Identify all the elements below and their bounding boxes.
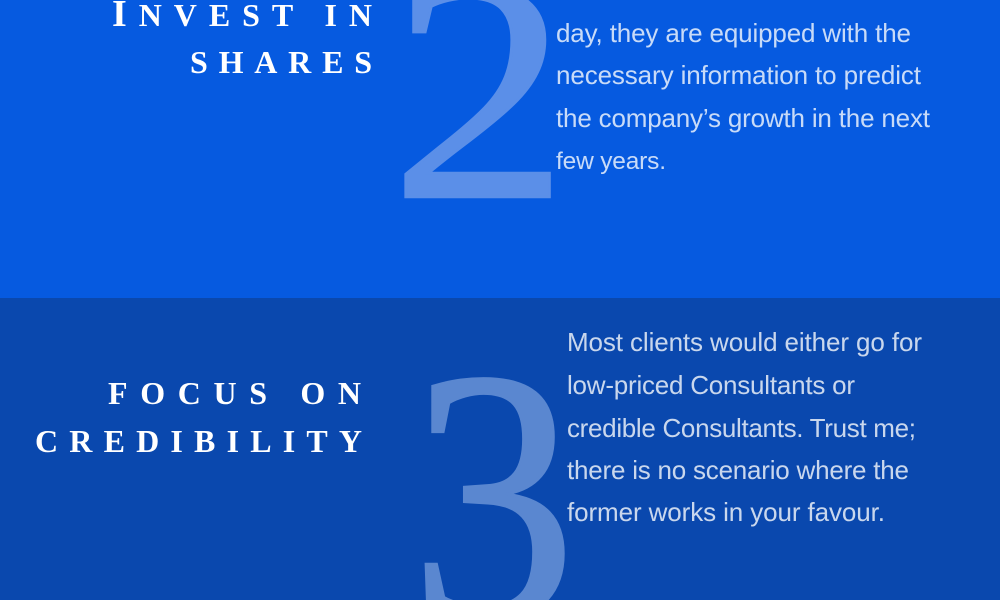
heading: focus on credibility: FOCUS ON: [108, 375, 361, 411]
body text: focus on credibility: Most clients would either go for: [567, 327, 922, 357]
body text: invest in shares: [556, 18, 931, 175]
heading: invest in shares: [112, 0, 372, 80]
body text: focus on credibility: [567, 327, 922, 527]
body text: focus on credibility: credible Consultants. Trust me;: [567, 413, 916, 443]
body text: focus on credibility: there is no scenario where the: [567, 455, 909, 485]
heading: focus on credibility: [35, 375, 362, 459]
panel: focus on credibility: [0, 296, 1000, 600]
body text: invest in shares: necessary information to predict: [556, 60, 922, 90]
body text: focus on credibility: former works in your favour.: [567, 497, 885, 527]
body text: invest in shares: day, they are equipped with the: [556, 18, 911, 48]
body text: invest in shares: few years.: [556, 148, 666, 175]
heading: invest in shares: SHARES: [190, 44, 372, 80]
heading: focus on credibility: CREDIBILITY: [35, 423, 362, 459]
panel: invest in shares: [113, 0, 930, 198]
body text: invest in shares: the company’s growth in the next: [556, 103, 931, 133]
body text: focus on credibility: low-priced Consultants or: [567, 370, 855, 400]
